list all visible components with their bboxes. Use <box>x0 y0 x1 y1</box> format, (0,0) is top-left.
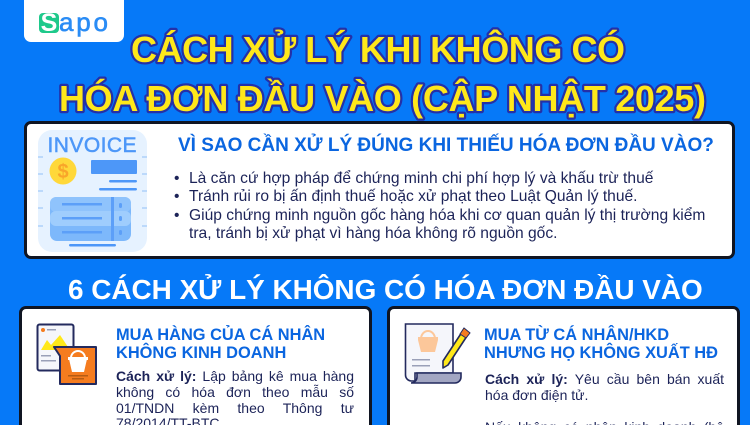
card text: seller: hóa đơn điện tử. <box>485 387 588 403</box>
card text: individuals: Cách xử lý: Lập bảng kê mua hàng <box>116 368 354 384</box>
card text: individuals <box>116 368 354 425</box>
panel: seller does not issue invoice <box>387 306 740 425</box>
icon: invoice <box>38 130 147 252</box>
card text: seller: Cách xử lý: Yêu cầu bên bán xuất <box>485 371 724 387</box>
title: CÁCH XỬ LÝ KHI KHÔNG CÓ <box>131 28 625 70</box>
panel: buy from individuals <box>19 306 372 425</box>
icon: photo and basket <box>36 324 97 385</box>
logo: Sapo: S <box>41 9 57 37</box>
why bullet list: • <box>174 170 179 187</box>
card heading: seller: MUA TỪ CÁ NHÂN/HKD <box>484 326 669 344</box>
section heading: 6 CÁCH XỬ LÝ KHÔNG CÓ HÓA ĐƠN ĐẦU VÀO <box>68 274 703 305</box>
why bullet list: tra, tránh bị xử phạt vì hàng hóa không rõ nguồn gốc. <box>189 225 557 242</box>
card text: individuals: 01/TNDN kèm theo Thông tư <box>116 400 354 416</box>
why bullet list: • <box>174 207 179 224</box>
why bullet list: Là căn cứ hợp pháp để chứng minh chi phí hợp lý và khấu trừ thuế <box>189 170 653 187</box>
card heading: individuals <box>116 325 325 362</box>
card text: individuals: không có hóa đơn theo mẫu số <box>116 384 354 400</box>
card heading: individuals: MUA HÀNG CỦA CÁ NHÂN <box>116 326 325 344</box>
why bullet list: Giúp chứng minh nguồn gốc hàng hóa khi cơ quan quản lý thị trường kiểm <box>189 207 705 224</box>
title: HÓA ĐƠN ĐẦU VÀO (CẬP NHẬT 2025) <box>59 77 706 119</box>
icon: invoice: $ <box>57 161 69 183</box>
why bullet list: • <box>174 188 179 205</box>
card heading: seller <box>484 325 718 362</box>
why bullet list <box>174 170 705 242</box>
logo: Sapo: apo <box>59 7 108 37</box>
card heading: seller: NHƯNG HỌ KHÔNG XUẤT HĐ <box>484 344 718 362</box>
card text: seller <box>485 371 724 425</box>
icon: document and pencil <box>404 323 471 384</box>
card heading: individuals: KHÔNG KINH DOANH <box>116 344 286 362</box>
title <box>59 27 706 121</box>
why heading: VÌ SAO CẦN XỬ LÝ ĐÚNG KHI THIẾU HÓA ĐƠN ĐẦU VÀO? <box>178 135 714 156</box>
panel: why handle correctly <box>24 121 735 259</box>
logo card <box>24 0 124 42</box>
why bullet list: Tránh rủi ro bị ấn định thuế hoặc xử phạt theo Luật Quản lý thuế. <box>189 188 638 205</box>
icon: invoice: INVOICE <box>48 134 136 157</box>
